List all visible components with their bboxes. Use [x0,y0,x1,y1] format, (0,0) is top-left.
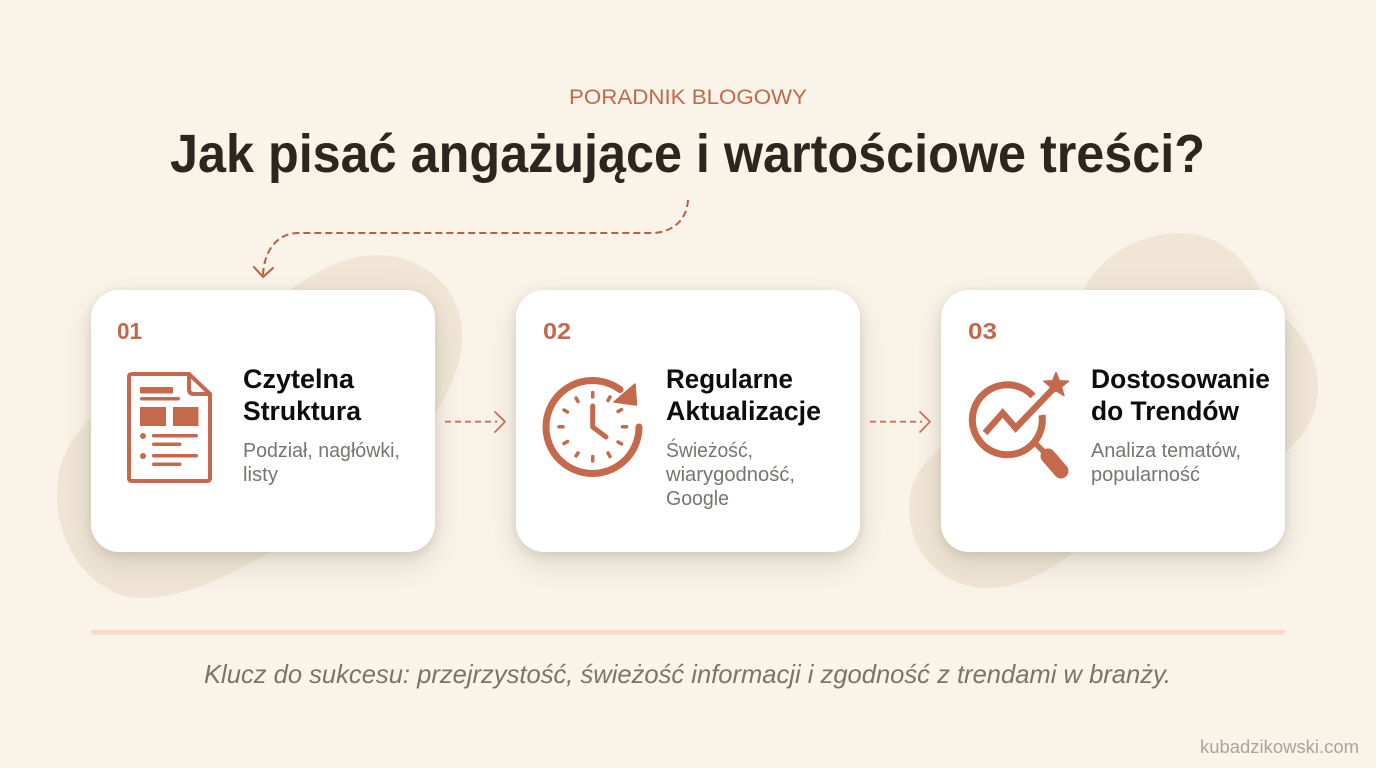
arrow: card 01 to card 02 [445,412,505,432]
card 02 description [665,438,795,510]
icon: document [129,374,210,481]
card 01 heading: Czytelna [243,364,355,394]
footer credit: kubadzikowski.com [1200,737,1359,757]
card 03 heading: do Trendów [1091,396,1240,426]
panel: card 02 [516,290,860,552]
card 01 heading [243,364,362,426]
card 02 heading: Aktualizacje [666,396,821,426]
card 01 description: listy [243,464,278,486]
card 03 description [1091,440,1241,486]
arrow: dashed from title to first card [254,200,688,277]
icon: clock with refresh arrow [546,380,639,473]
card 03 heading: Dostosowanie [1091,364,1270,394]
card 03 description: Analiza tematów, [1091,440,1241,462]
closing statement: Klucz do sukcesu: przejrzystość, świeżość informacji i zgodność z trendami w branży. [204,659,1171,689]
step number 01: 01 [117,318,142,344]
arrow: card 02 to card 03 [870,412,930,432]
panel: card 03 [941,290,1285,552]
card 02 description: wiarygodność, [665,464,795,486]
card 02 description: Świeżość, [666,438,753,462]
card 02 heading [666,364,821,426]
card 03 description: popularność [1091,464,1200,486]
card 01 description [243,440,400,486]
card 03 heading [1091,364,1270,426]
card 01 description: Podział, nagłówki, [243,440,400,462]
eyebrow label: PORADNIK BLOGOWY [569,86,807,109]
title: Jak pisać angażujące i wartościowe treści? [170,124,1205,184]
card 01 heading: Struktura [243,396,362,426]
card 02 heading: Regularne [666,364,793,394]
card 02 description: Google [666,488,729,510]
blob: right background shape [909,233,1318,588]
blob: left background shape [57,255,462,598]
divider line [91,630,1285,634]
step number 03: 03 [968,318,997,344]
panel: card 01 [91,290,435,552]
step number 02: 02 [543,318,571,344]
icon: magnifier with trend line and star [972,372,1069,471]
